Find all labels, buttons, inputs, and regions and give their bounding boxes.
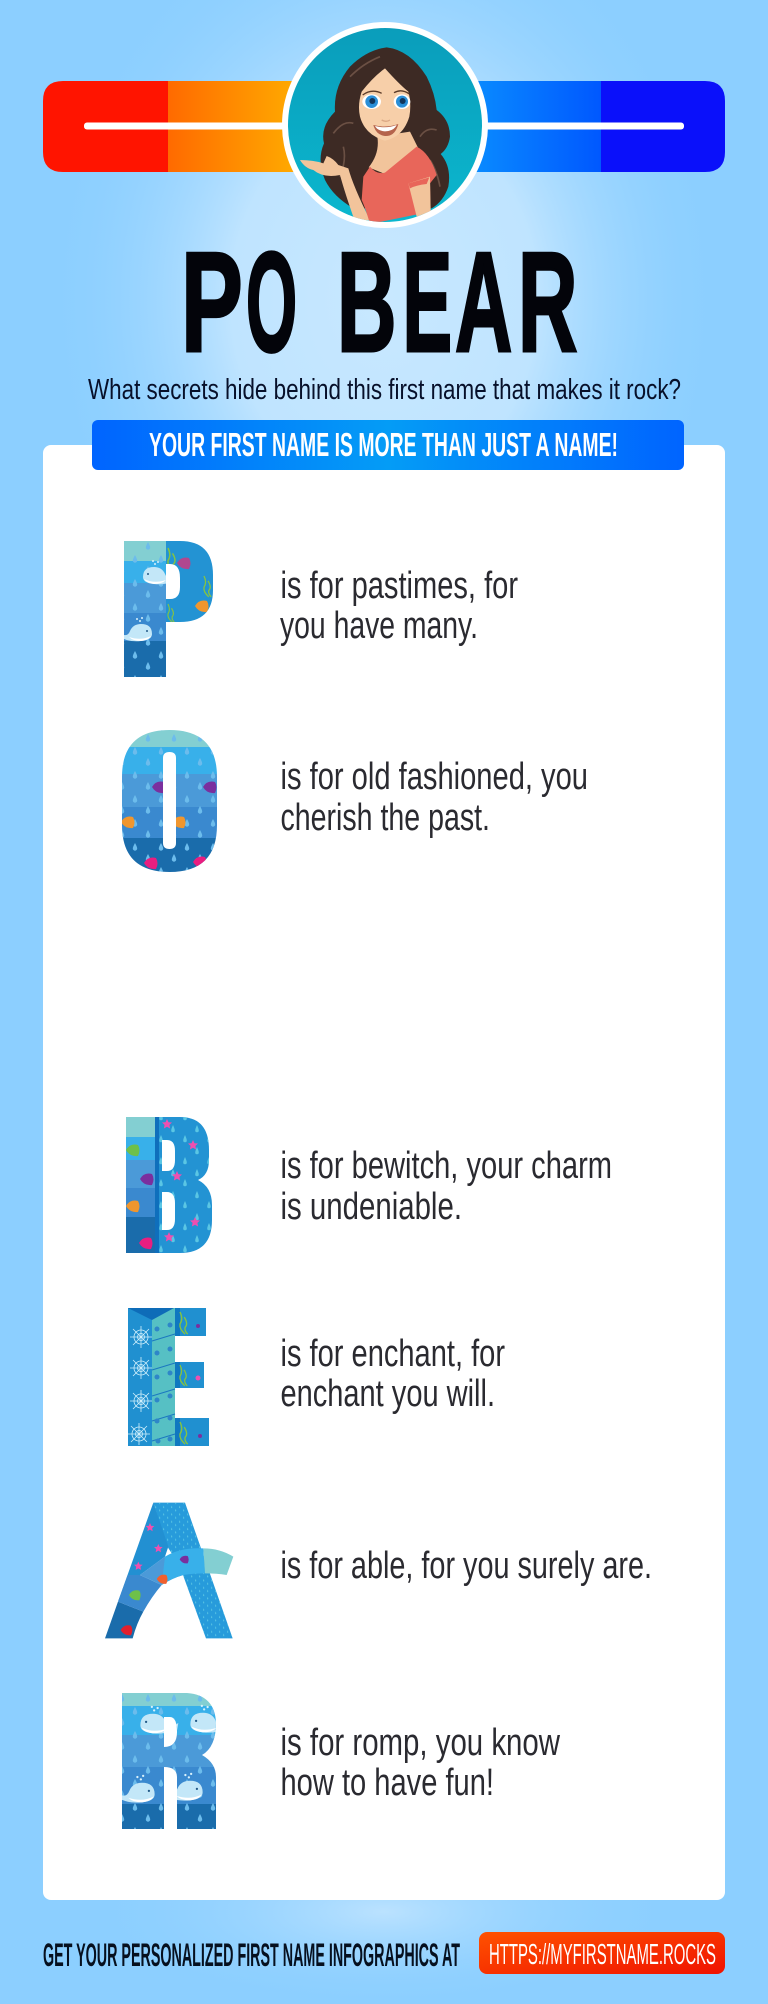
text: P line: [280, 565, 518, 647]
eyes: [362, 94, 381, 109]
text: E line: [280, 1333, 505, 1415]
text: B line: is for bewitch, your charm: [280, 1145, 612, 1187]
shirt: [362, 147, 437, 224]
title: [181, 223, 577, 382]
text: R line: is for romp, you know: [280, 1722, 560, 1764]
arm and hand: [300, 156, 370, 222]
letter P: [119, 541, 213, 677]
text: P line: you have many.: [280, 605, 478, 647]
text: B line: is undeniable.: [280, 1186, 462, 1228]
title: E: [402, 223, 452, 382]
text: O line: cherish the past.: [280, 797, 490, 839]
letter O: [121, 730, 217, 872]
nose and mouth: [382, 120, 390, 121]
neck and chest: [369, 132, 418, 174]
white content panel: [43, 445, 725, 1900]
text: O line: is for old fashioned, you: [280, 756, 588, 798]
letter B: [126, 1117, 212, 1253]
letter A: [105, 1503, 233, 1638]
letter E: [128, 1308, 209, 1446]
text: R line: [280, 1722, 560, 1804]
hair: [321, 47, 450, 208]
text: O line: [280, 756, 588, 839]
text: E line: enchant you will.: [280, 1373, 495, 1415]
face: [359, 68, 410, 141]
title: R: [518, 223, 577, 382]
text: R line: how to have fun!: [280, 1762, 494, 1804]
banner: [92, 420, 684, 470]
text: P line: is for pastimes, for: [280, 565, 518, 607]
letter R: [122, 1693, 216, 1829]
footer url button: [479, 1932, 725, 1974]
title: B: [337, 223, 396, 382]
text: B line: [280, 1145, 612, 1228]
avatar: cartoon woman in circle: [282, 22, 488, 228]
title: A: [455, 224, 512, 382]
text: A line: is for able, for you surely are.: [280, 1545, 652, 1587]
title: P: [181, 223, 243, 382]
title: O: [246, 224, 297, 382]
header gradient bar: [43, 81, 725, 172]
text: E line: is for enchant, for: [280, 1333, 505, 1375]
